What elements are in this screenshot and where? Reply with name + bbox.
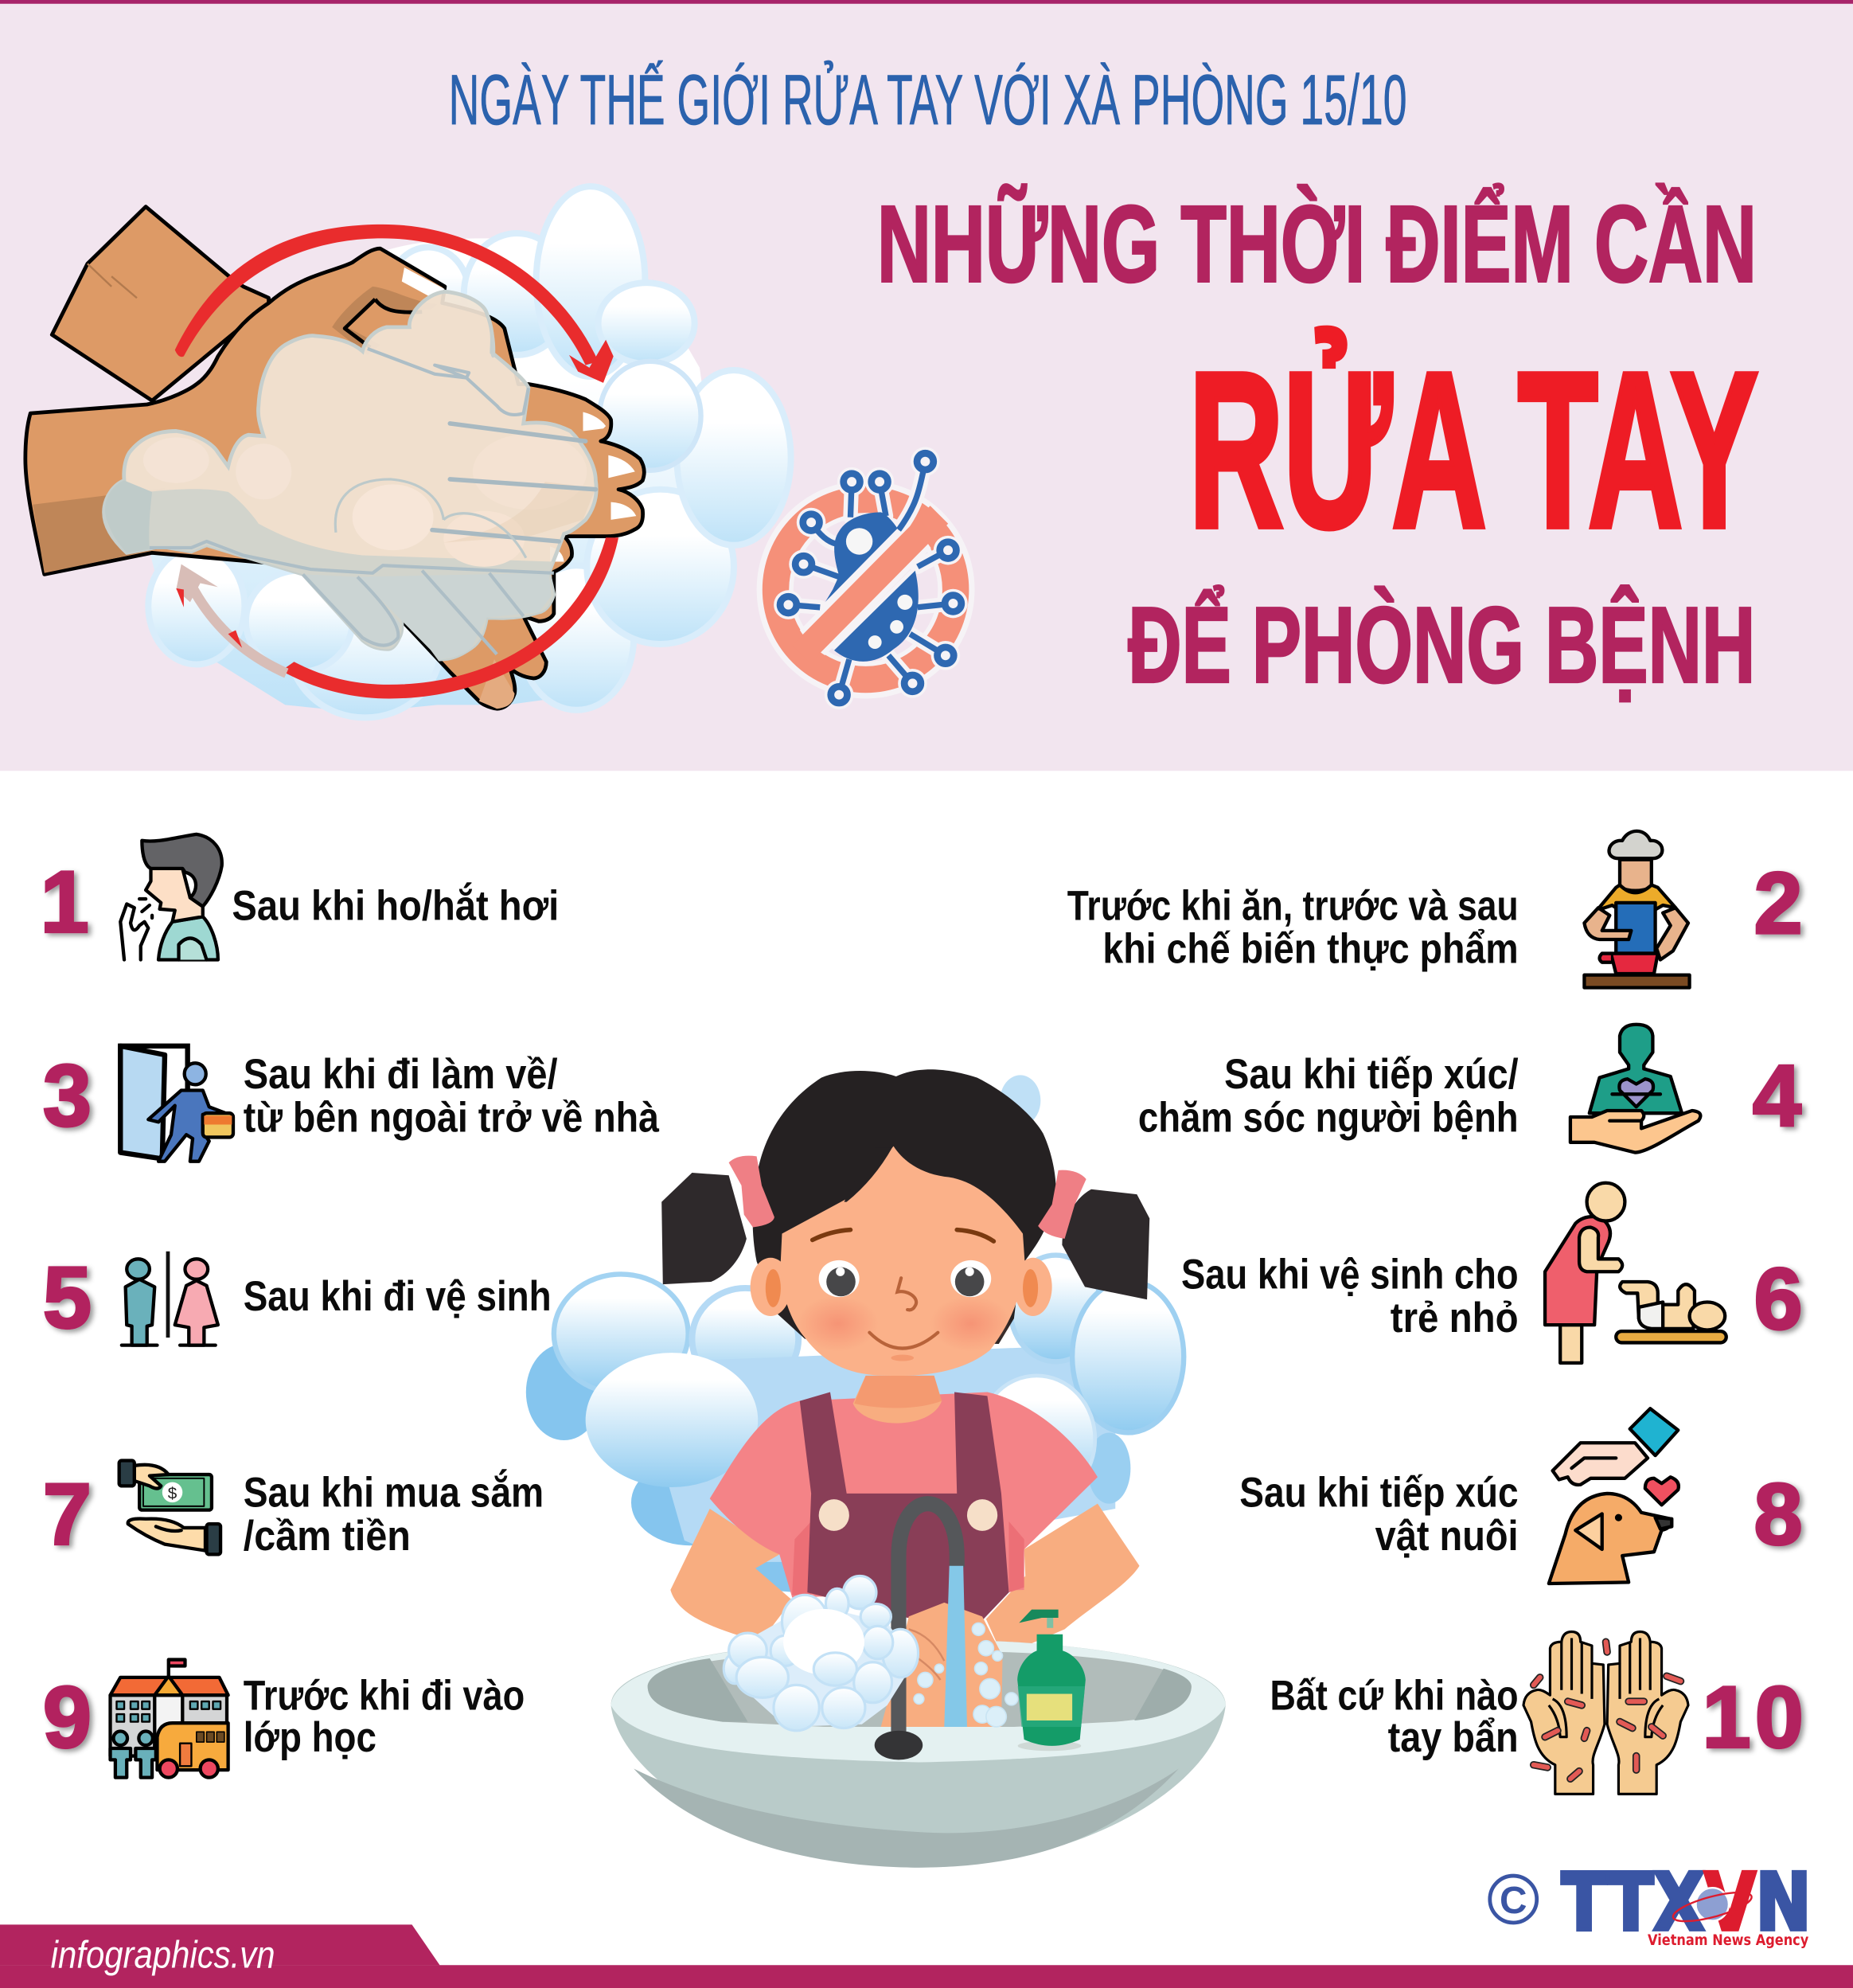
text: item 10: tay bẩn	[1388, 1714, 1519, 1761]
text: item 4	[1138, 1051, 1519, 1141]
text: item 3: từ bên ngoài trở về nhà	[244, 1094, 660, 1141]
icon: chef cooking	[1584, 831, 1690, 988]
item 1	[41, 834, 559, 960]
number 2: 2	[1754, 855, 1803, 952]
illustration: foam cloud behind hands	[148, 186, 791, 717]
footer text: infographics.vn	[51, 1935, 275, 1977]
illustration: small soap bubbles	[914, 1623, 1018, 1727]
number 1: 1	[41, 853, 89, 951]
text: item 2	[1067, 882, 1519, 972]
number 5: 5	[43, 1249, 92, 1346]
number 8: 8	[1754, 1467, 1803, 1564]
illustration: soap bottle	[1017, 1610, 1086, 1751]
text: item 9	[244, 1672, 525, 1761]
icon: school, bus and students	[111, 1660, 228, 1778]
illustration: girl	[661, 1069, 1149, 1656]
item 10	[1270, 1632, 1804, 1794]
icon: money between hands: $	[168, 1484, 177, 1502]
arrow: faded bottom arrow under foam	[176, 564, 287, 674]
item 7	[43, 1461, 544, 1564]
item 2	[1067, 831, 1803, 988]
illustration: hands under water	[881, 1603, 1003, 1727]
logo: copyright mark: C	[1500, 1880, 1527, 1922]
item 8	[1239, 1408, 1803, 1584]
text: item 8: Sau khi tiếp xúc	[1239, 1470, 1519, 1517]
text: item 3: Sau khi đi làm về/	[244, 1051, 558, 1098]
text: item 5: Sau khi đi vệ sinh	[244, 1273, 552, 1320]
number 10: 10	[1703, 1669, 1804, 1766]
footer band	[0, 1924, 1853, 1988]
text: item 2: Trước khi ăn, trước và sau	[1067, 882, 1519, 929]
number 9: 9	[43, 1669, 92, 1766]
text: item 7: /cầm tiền	[244, 1513, 411, 1560]
icon: virus prohibition sign	[757, 447, 975, 709]
item 6	[1181, 1183, 1803, 1363]
text: item 7: Sau khi mua sắm	[244, 1470, 544, 1517]
text: item 4: Sau khi tiếp xúc/	[1224, 1051, 1519, 1098]
logo: TTXVN Vietnam News Agency: Vietnam News Agency	[1648, 1932, 1808, 1949]
item 3	[43, 1046, 660, 1162]
text: item 9: Trước khi đi vào	[244, 1672, 525, 1719]
header panel background	[0, 0, 1853, 771]
icon: caring hand with patient	[1570, 1025, 1700, 1153]
logo: TTXVN Vietnam News Agency: TTXVN	[1562, 1857, 1811, 1949]
text: item 6: Sau khi vệ sinh cho	[1181, 1252, 1519, 1299]
item 5	[43, 1249, 552, 1346]
arrow: red circular arrow bottom	[281, 537, 618, 698]
item 4	[1138, 1025, 1801, 1153]
illustration: girl foam background	[526, 1075, 1184, 1592]
icon: restroom man and woman	[122, 1252, 218, 1346]
text: item 8: vật nuôi	[1375, 1513, 1519, 1560]
text: item 3	[244, 1051, 660, 1141]
illustration: sink	[611, 1639, 1226, 1868]
text: item 1: Sau khi ho/hắt hơi	[232, 882, 559, 929]
number 3: 3	[43, 1048, 92, 1145]
number 7: 7	[43, 1467, 92, 1564]
illustration: soap foam on hands	[724, 1576, 918, 1731]
number 6: 6	[1754, 1251, 1803, 1348]
icon: person arriving through door	[120, 1046, 233, 1162]
text: item 4: chăm sóc người bệnh	[1138, 1094, 1519, 1141]
illustration: foam over hands	[104, 291, 596, 659]
illustration: faucet and water	[875, 1504, 967, 1760]
icon: money between hands	[119, 1461, 220, 1554]
text: item 6	[1181, 1252, 1519, 1342]
item 9	[43, 1660, 525, 1778]
icon: hand petting dog	[1549, 1408, 1679, 1584]
text: item 2: khi chế biến thực phẩm	[1102, 925, 1519, 972]
text: item 8	[1239, 1470, 1519, 1560]
illustration: washing hands	[25, 207, 644, 709]
text: item 10: Bất cứ khi nào	[1270, 1672, 1519, 1719]
icon: sneezing man	[120, 834, 222, 960]
text: item 10	[1270, 1672, 1519, 1761]
text: item 7	[244, 1470, 544, 1560]
icon: dirty hands with germs	[1523, 1632, 1688, 1794]
icon: mother and baby	[1545, 1183, 1726, 1363]
arrow: red circular arrow top	[175, 225, 614, 383]
number 4: 4	[1753, 1048, 1801, 1145]
logo: copyright mark	[1490, 1876, 1537, 1923]
text: item 9: lớp học	[244, 1714, 376, 1761]
text: item 6: trẻ nhỏ	[1391, 1295, 1519, 1342]
